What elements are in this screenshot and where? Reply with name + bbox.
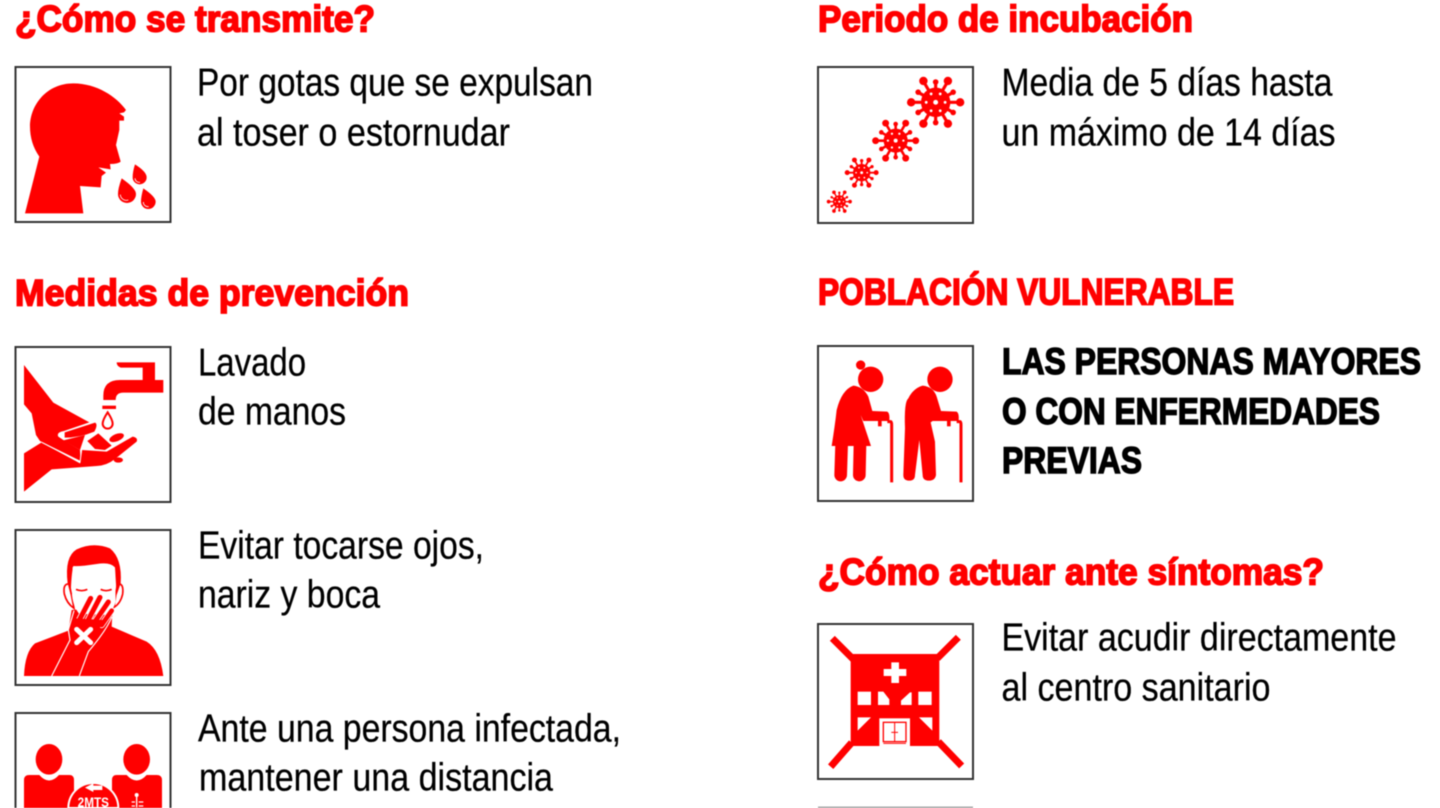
heading: what to do with symptoms: ¿Cómo actuar ante síntomas?: [818, 552, 1324, 592]
icon: two metres distance: [16, 713, 170, 808]
text: hand washing: [198, 342, 346, 434]
icon: do not touch face: [16, 530, 170, 685]
text: incubation period: Media de 5 días hasta: [1002, 62, 1333, 104]
text: do not touch face: nariz y boca: [198, 574, 380, 616]
text: what to do with symptoms: al centro sanitario: [1002, 666, 1270, 710]
text: keep distance: Ante una persona infectada,: [198, 708, 621, 750]
panel: prevention measures: [15, 272, 621, 808]
heading: prevention measures: Medidas de prevención: [15, 272, 409, 314]
icon: crossed-out health centre: [818, 624, 973, 779]
icon: hand washing: [16, 347, 170, 502]
text: do not touch face: [198, 524, 484, 616]
text: keep distance: [198, 708, 621, 800]
next icon frame, cropped at page edge: [818, 806, 973, 808]
text: do not touch face: Evitar tocarse ojos,: [198, 524, 484, 568]
text: vulnerable population: [1002, 341, 1421, 481]
panel: vulnerable population: [818, 270, 1421, 501]
panel: how it spreads: [15, 0, 593, 222]
heading: vulnerable population: POBLACIÓN VULNERABLE: [818, 270, 1234, 312]
text: incubation period: [1002, 62, 1336, 154]
text: hand washing: de manos: [198, 390, 346, 434]
text: keep distance: mantener una distancia: [199, 756, 553, 800]
text: hand washing: Lavado: [198, 342, 306, 384]
icon: elderly couple with canes: [818, 346, 973, 501]
text: how it spreads: [197, 62, 593, 154]
text: what to do with symptoms: [1002, 616, 1396, 710]
text: vulnerable population: O CON ENFERMEDADES: [1002, 391, 1380, 432]
panel: what to do with symptoms: [818, 552, 1396, 807]
text: vulnerable population: PREVIAS: [1002, 440, 1142, 481]
panel: incubation period: [818, 0, 1336, 223]
icon: person coughing droplets: [16, 67, 170, 222]
text: how it spreads: al toser o estornudar: [197, 112, 510, 154]
icon: growing virus particles: [818, 67, 973, 223]
text: how it spreads: Por gotas que se expulsan: [197, 62, 593, 104]
text: incubation period: un máximo de 14 días: [1002, 112, 1336, 154]
